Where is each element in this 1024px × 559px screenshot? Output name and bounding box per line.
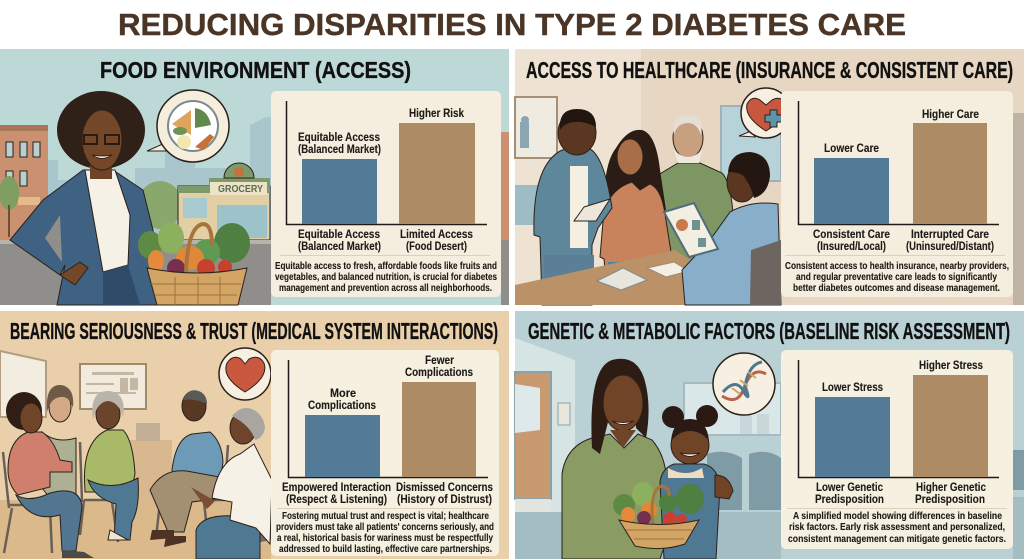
icon: dna helix [713,353,775,415]
icon: healthy plate speech bubble [147,90,229,162]
description [785,261,1009,294]
bar chart: care access: Interrupted Care [911,229,989,241]
bar chart: genetic risk: Lower Genetic [816,482,884,494]
panel heading: FOOD ENVIRONMENT (ACCESS) [100,57,411,83]
bar chart: trust: Complications [308,400,376,412]
bar chart: trust: More [330,388,356,400]
description: vegetables, and balanced nutrition, is crucial for diabetes [275,272,497,283]
scene: community room [0,311,509,559]
panel: bearing seriousness and trust [0,311,509,559]
bar chart: food access: (Balanced Market) [298,241,381,253]
figure: seated group [3,385,228,558]
chart card [271,91,501,297]
icon: heart [219,348,271,400]
figure: mother and daughter [562,359,733,559]
bar chart: genetic risk: Higher Stress [919,360,983,372]
icon: heart with plus speech bubble [739,88,791,138]
bar chart: care access: Consistent Care [813,229,890,241]
description: addressed to build lasting, effective care partnerships. [279,544,492,555]
bar chart: genetic risk: Lower Stress [822,382,883,394]
description: management and prevention across all neighborhoods. [279,283,492,294]
scene: waiting room [515,311,1024,559]
bar chart: genetic risk: Predisposition [915,494,985,506]
scene: clinic reception [515,49,1024,305]
bar chart: food access: Equitable Access [298,229,380,241]
panel: food environment [0,49,509,305]
bar chart: genetic risk: Higher Genetic [916,482,987,494]
icon: vegetable basket [138,222,250,305]
bar chart: trust: (History of Distrust) [397,494,492,506]
bar chart: care access: Lower Care [824,143,879,155]
desk with papers [515,250,735,305]
title: REDUCING DISPARITIES IN TYPE 2 DIABETES CARE [118,7,906,42]
bar chart: food access: Equitable Access [298,132,380,144]
bar chart: care access: Higher Care [922,109,979,121]
description [276,511,494,555]
chart card [271,350,499,556]
description: providers must take all patients' concerns seriously, and [276,522,494,533]
bar chart: care access: (Insured/Local) [817,241,886,253]
icon: vegetable basket [613,482,704,549]
bar chart: trust: Fewer [425,355,454,367]
bar chart: food access: (Balanced Market) [298,144,381,156]
bar chart: food access: Limited Access [400,229,473,241]
description [788,511,1006,545]
figure: clinician in white coat [191,408,272,559]
bar chart: care access: (Uninsured/Distant) [906,241,994,253]
bar chart: food access [286,101,487,253]
bar chart: genetic risk [798,360,999,506]
bar chart: trust: Dismissed Concerns [396,482,493,494]
bar chart: trust [282,355,493,506]
bar chart: trust: Empowered Interaction [282,482,391,494]
bar chart: trust: (Respect & Listening) [286,494,387,506]
description: a real, historical basis for wariness must be respectfully [277,533,493,544]
figure: three people standing [534,109,734,305]
scene: street with grocery [0,49,509,305]
panel heading: BEARING SERIOUSNESS & TRUST (MEDICAL SYSTEM INTERACTIONS) [10,318,498,344]
bar chart: trust: Complications [405,367,473,379]
description: Fostering mutual trust and respect is vital; healthcare [282,511,489,522]
panel: access to healthcare [515,49,1024,305]
grocery sign: GROCERY [218,183,263,195]
bar chart: genetic risk: Predisposition [815,494,884,506]
chart card [781,350,1013,549]
bar chart: food access: Higher Risk [409,108,465,120]
bar chart: food access: (Food Desert) [406,241,467,253]
description [275,261,497,294]
bar chart: care access [798,101,999,253]
chart card [781,91,1013,297]
figure: woman in blue blazer [10,91,157,305]
panel: genetic and metabolic factors [515,311,1024,559]
figure: seated patient with clipboard [664,152,781,305]
description: Equitable access to fresh, affordable foods like fruits and [275,261,497,272]
